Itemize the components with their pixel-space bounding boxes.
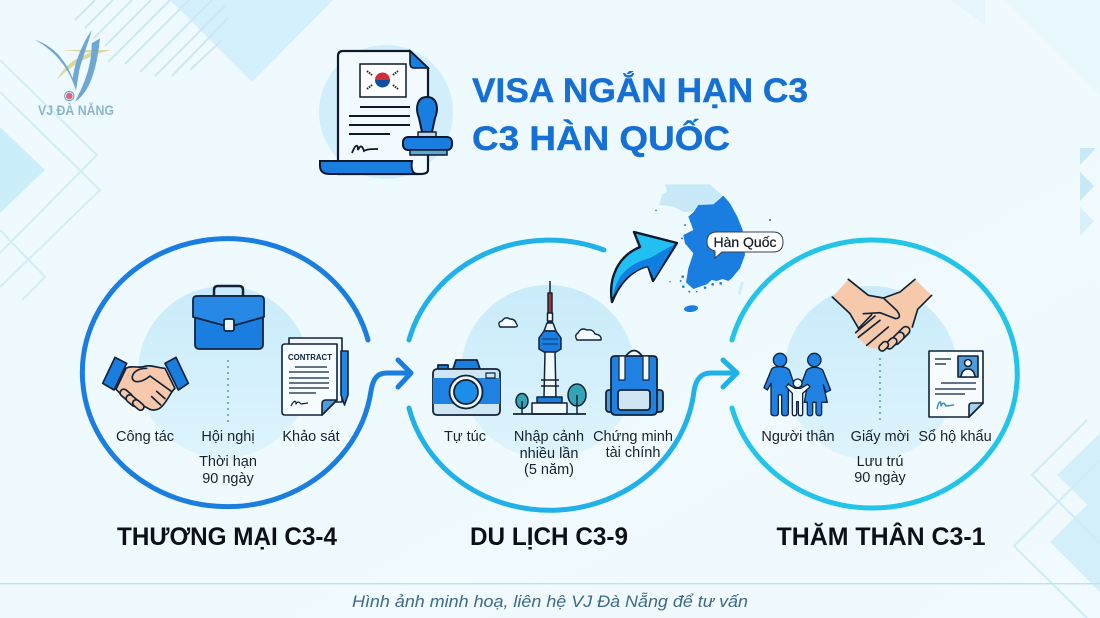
labels bbox=[761, 429, 992, 486]
ring with arrow bbox=[82, 239, 411, 507]
icon: camera bbox=[433, 360, 500, 415]
labels: Công tác bbox=[116, 429, 174, 445]
labels: Nhập cảnh bbox=[514, 429, 584, 445]
title bbox=[472, 72, 808, 158]
icon: household registration book bbox=[929, 351, 983, 417]
callout: Hàn Quốc: Hàn Quốc bbox=[714, 234, 776, 250]
icon: family bbox=[764, 353, 831, 416]
connector dots bbox=[227, 360, 229, 422]
heading: thương mại: THƯƠNG MẠI C3-4 bbox=[117, 523, 337, 551]
map: Korea bbox=[655, 184, 783, 313]
icon: Seoul tower bbox=[513, 281, 586, 414]
labels: Người thân bbox=[761, 429, 835, 445]
logo: VJ Đà Nẵng bbox=[35, 30, 114, 118]
connector dots bbox=[879, 358, 881, 422]
labels: Lưu trú bbox=[857, 454, 903, 470]
footer: Hình ảnh minh hoạ, liên hệ VJ Đà Nẵng để tư vấn bbox=[352, 592, 748, 611]
labels: Thời hạn bbox=[199, 454, 257, 470]
panel: thương mại C3-4 bbox=[82, 239, 411, 551]
heading: du lịch: DU LỊCH C3-9 bbox=[470, 523, 628, 551]
labels: Chứng minh bbox=[593, 429, 673, 445]
title: C3 HÀN QUỐC bbox=[472, 119, 730, 158]
labels: Hội nghị bbox=[201, 429, 255, 445]
icon: backpack bbox=[606, 350, 663, 415]
icon: contract: CONTRACT bbox=[288, 353, 332, 362]
arrow: towards Korea map bbox=[611, 232, 677, 302]
icon: contract bbox=[282, 338, 348, 415]
labels bbox=[444, 429, 673, 478]
labels: 90 ngày bbox=[202, 471, 255, 487]
labels: Giấy mời bbox=[851, 429, 909, 445]
icon: briefcase bbox=[193, 286, 264, 349]
panel: thăm thân C3-1 bbox=[732, 240, 1017, 551]
logo text: VJ ĐÀ NẴNG bbox=[38, 103, 114, 118]
labels bbox=[116, 429, 340, 487]
title: VISA NGẮN HẠN C3 bbox=[472, 72, 808, 110]
labels: (5 năm) bbox=[524, 462, 574, 478]
icon: clouds bbox=[499, 318, 601, 340]
ring bbox=[732, 240, 1017, 508]
labels: 90 ngày bbox=[854, 470, 907, 486]
labels: Tự túc bbox=[444, 429, 486, 445]
labels: Khảo sát bbox=[282, 429, 340, 445]
panel: du lịch C3-9 bbox=[409, 240, 737, 551]
labels: Sổ hộ khẩu bbox=[918, 429, 992, 445]
icon: big handshake bbox=[832, 279, 932, 352]
labels: nhiều lần bbox=[520, 446, 578, 462]
labels: tài chính bbox=[606, 445, 660, 461]
icon: visa document with stamp bbox=[319, 45, 453, 179]
heading: thăm thân: THĂM THÂN C3-1 bbox=[776, 521, 986, 551]
ring with arrow bbox=[409, 240, 737, 510]
icon: business handshake bbox=[103, 357, 188, 412]
